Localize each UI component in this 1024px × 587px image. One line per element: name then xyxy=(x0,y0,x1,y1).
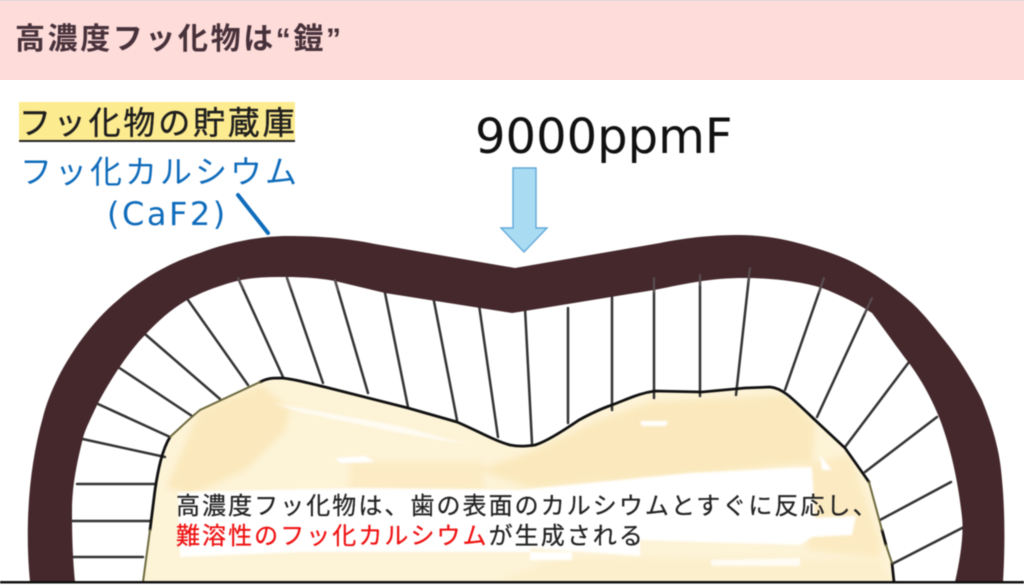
dentin: yellow fill xyxy=(140,375,900,585)
label: 9000ppmF: 9000ppmF xyxy=(475,109,732,165)
label: calcium fluoride: フッ化カルシウム xyxy=(20,154,300,190)
line 2: 難溶性のフッ化カルシウムが生成される xyxy=(176,523,645,550)
baseline xyxy=(0,581,1024,584)
body text xyxy=(176,492,879,550)
arrow: fluoride application xyxy=(501,168,547,252)
tooth diagram xyxy=(0,166,1024,584)
enamel rods xyxy=(67,268,964,563)
pointer line to CaF2 xyxy=(238,195,268,233)
label: CaF2: (CaF2) xyxy=(107,195,228,233)
heading: fluoride reservoir: フッ化物の貯蔵庫 xyxy=(19,105,297,141)
title: 高濃度フッ化物は“鎧” xyxy=(15,23,344,56)
line 1: 高濃度フッ化物は、歯の表面のカルシウムとすぐに反応し、 xyxy=(176,493,879,520)
rod tips over band xyxy=(238,268,872,313)
header band xyxy=(0,0,1024,80)
enamel band: calcium fluoride layer xyxy=(28,235,1004,582)
dentin outline xyxy=(143,378,894,582)
